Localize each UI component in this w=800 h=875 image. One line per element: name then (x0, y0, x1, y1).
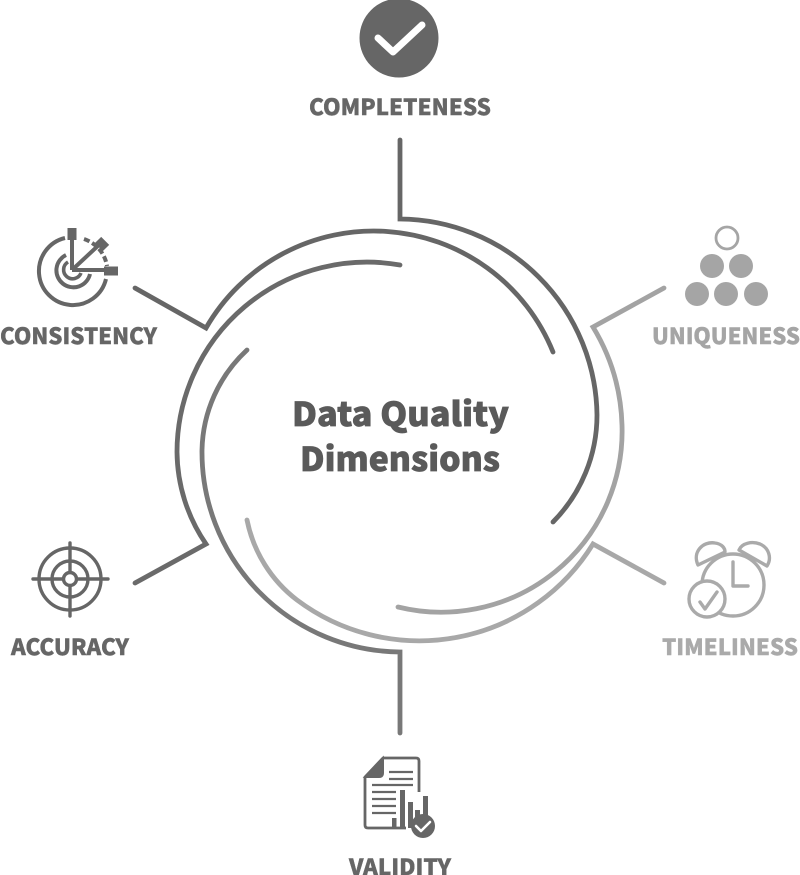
label: accuracy: ACCURACY (10, 630, 130, 662)
icon: accuracy crosshair (33, 543, 108, 616)
icon: completeness check (360, 0, 438, 78)
connector ring: completeness (400, 140, 597, 522)
icon: uniqueness dots (685, 227, 768, 306)
title: Data Quality (292, 388, 509, 436)
connector ring: uniqueness (398, 288, 664, 612)
label: completeness: COMPLETENESS (309, 90, 491, 122)
icon: consistency target with arrows (39, 228, 118, 305)
label: timeliness: TIMELINESS (662, 630, 798, 662)
connector ring: validity (202, 350, 400, 733)
icon: timeliness alarm clock (689, 543, 769, 617)
label: uniqueness: UNIQUENESS (652, 319, 800, 351)
title (292, 388, 509, 481)
connector ring: consistency (135, 231, 553, 352)
connector ring: accuracy (135, 262, 400, 583)
title: Dimensions (300, 433, 500, 481)
label: consistency: CONSISTENCY (0, 319, 158, 351)
icon: validity document (365, 758, 435, 838)
connector ring: timeliness (247, 520, 664, 641)
